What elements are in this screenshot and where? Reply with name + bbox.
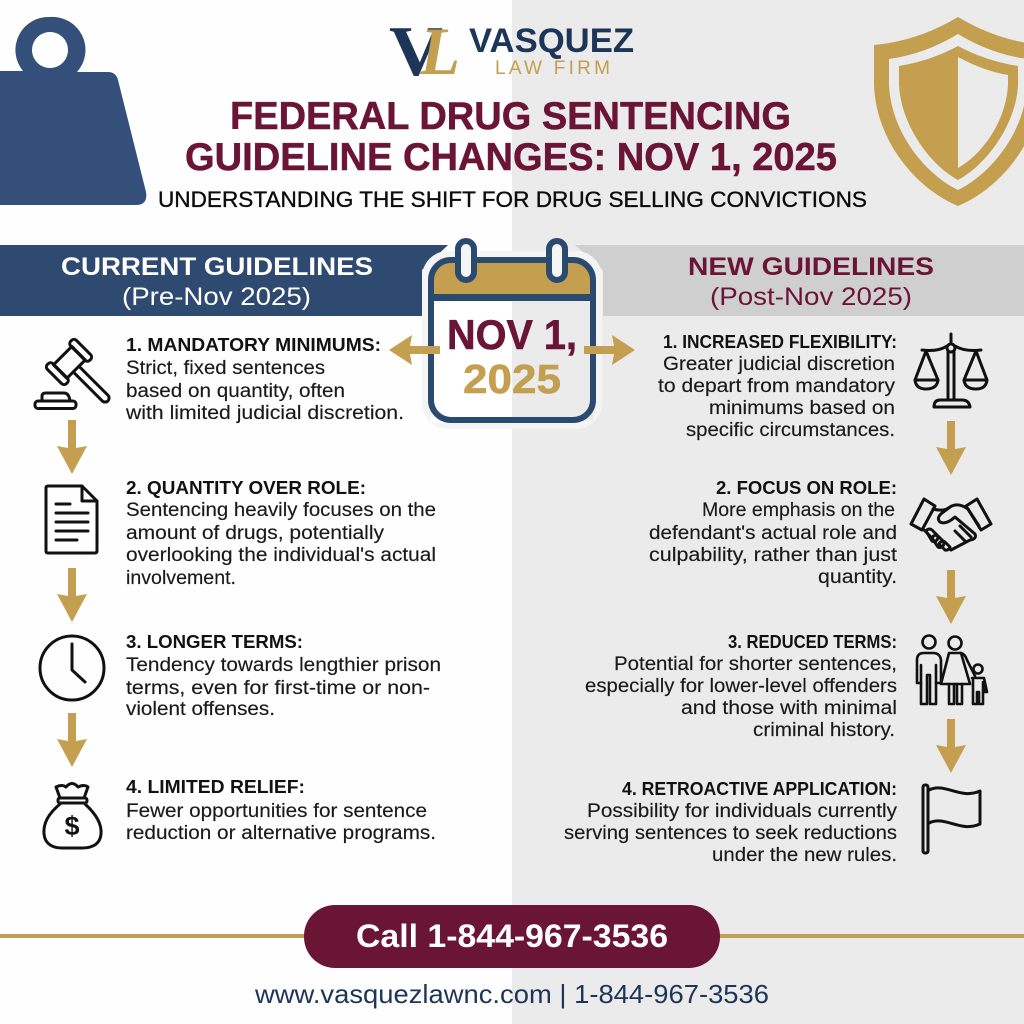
item 1 text: 1. INCREASED FLEXIBILITY: [663,332,897,352]
item 3 text: 3. LONGER TERMS: [126,632,303,652]
item 4 text [564,779,898,866]
icon: handshake [911,499,991,550]
item 4 text: 4. RETROACTIVE APPLICATION: [622,779,897,799]
item 1 text [125,335,404,424]
logo: Vasquez Law Firm: V [389,13,443,91]
logo: Vasquez Law Firm [389,13,634,91]
icon: money bag [44,784,101,848]
panel header: current guidelines: (Pre-Nov 2025) [122,283,311,311]
item 3 text: violent offenses. [126,699,275,720]
item 1 text: Strict, fixed sentences [126,358,325,379]
divider line left [0,934,306,938]
item 2 text: 2. QUANTITY OVER ROLE: [126,478,366,498]
item 3 text: 3. REDUCED TERMS: [728,632,897,652]
panel: current guidelines items [35,335,441,848]
item 1 text: to depart from mandatory [658,376,896,397]
item 1 text: 1. MANDATORY MINIMUMS: [126,335,381,355]
panel header: new guidelines: (Post-Nov 2025) [710,283,912,311]
item 4 text: Fewer opportunities for sentence [126,801,427,822]
item 1 text: with limited judicial discretion. [125,403,404,424]
logo: Vasquez Law Firm: L [419,13,460,89]
item 3 text [585,632,897,741]
item 2 text: overlooking the individual's actual [126,545,436,566]
panel header: current guidelines: CURRENT GUIDELINES [61,253,373,281]
icon: family [917,636,987,704]
item 2 text: involvement. [126,568,236,589]
item 2 text: amount of drugs, potentially [126,523,385,544]
arrow: step 2 to 3 [936,570,966,624]
item 1 text: specific circumstances. [686,420,895,441]
item 2 text: More emphasis on the [702,500,895,521]
logo: Vasquez Law Firm: VASQUEZ [469,22,634,60]
date text: 2025 [463,356,561,402]
item 1 text: based on quantity, often [126,381,345,402]
title [185,95,837,179]
icon: flag [923,785,980,853]
item 1 text: minimums based on [709,398,895,419]
icon: scales of justice [915,334,987,407]
divider line right [718,934,1024,938]
call to action button [304,905,720,968]
icon: calendar with date [422,241,602,429]
icon: clock [40,636,104,700]
icon: shield [874,17,1024,206]
item 4 text: serving sentences to seek reductions [564,823,897,844]
item 2 text: quantity. [818,567,897,588]
icon: kettlebell weight [0,17,146,205]
arrow: step 1 to 2 [936,421,966,475]
arrow: step 3 to 4 [936,719,966,773]
panel header: new guidelines [575,245,1024,316]
item 3 text [126,632,441,720]
date text: NOV 1, [447,311,577,358]
item 2 text: defendant's actual role and [649,523,897,544]
icon: gavel [35,338,122,415]
logo: Vasquez Law Firm: LAW FIRM [495,58,610,79]
item 2 text [126,478,436,589]
title: FEDERAL DRUG SENTENCING [230,95,791,138]
arrow: step 2 to 3 [57,568,87,622]
icon: document [46,486,97,553]
item 1 text [658,332,897,441]
icon: money bag: $ [64,811,80,841]
item 1 text: Greater judicial discretion [663,354,895,375]
item 4 text: 4. LIMITED RELIEF: [126,777,305,797]
item 3 text: criminal history. [753,720,895,741]
item 3 text: Tendency towards lengthier prison [126,655,441,676]
item 2 text [649,478,898,588]
panel header: current guidelines [0,245,448,316]
footer contact line: www.vasquezlawnc.com | 1-844-967-3536 [254,979,769,1009]
date text [447,311,577,402]
item 2 text: Sentencing heavily focuses on the [126,500,436,521]
subtitle: UNDERSTANDING THE SHIFT FOR DRUG SELLING CONVICTIONS [158,187,867,212]
panel header: new guidelines: NEW GUIDELINES [688,253,934,281]
item 3 text: and those with minimal [681,698,897,719]
arrow: step 1 to 2 [57,420,87,474]
item 4 text: Possibility for individuals currently [587,801,898,822]
item 3 text: Potential for shorter sentences, [614,654,897,675]
arrow: right from calendar [584,335,635,365]
call to action button: Call 1-844-967-3536 [356,918,668,954]
item 3 text: terms, even for first-time or non- [126,678,430,699]
title: GUIDELINE CHANGES: NOV 1, 2025 [185,136,837,179]
item 2 text: 2. FOCUS ON ROLE: [716,478,897,498]
item 2 text: culpability, rather than just [649,545,898,566]
arrow: left from calendar [389,335,440,365]
item 3 text: especially for lower-level offenders [585,676,897,697]
item 4 text [126,777,436,844]
item 4 text: reduction or alternative programs. [126,823,436,844]
arrow: step 3 to 4 [57,713,87,767]
panel: new guidelines items [564,332,991,866]
item 4 text: under the new rules. [712,845,897,866]
